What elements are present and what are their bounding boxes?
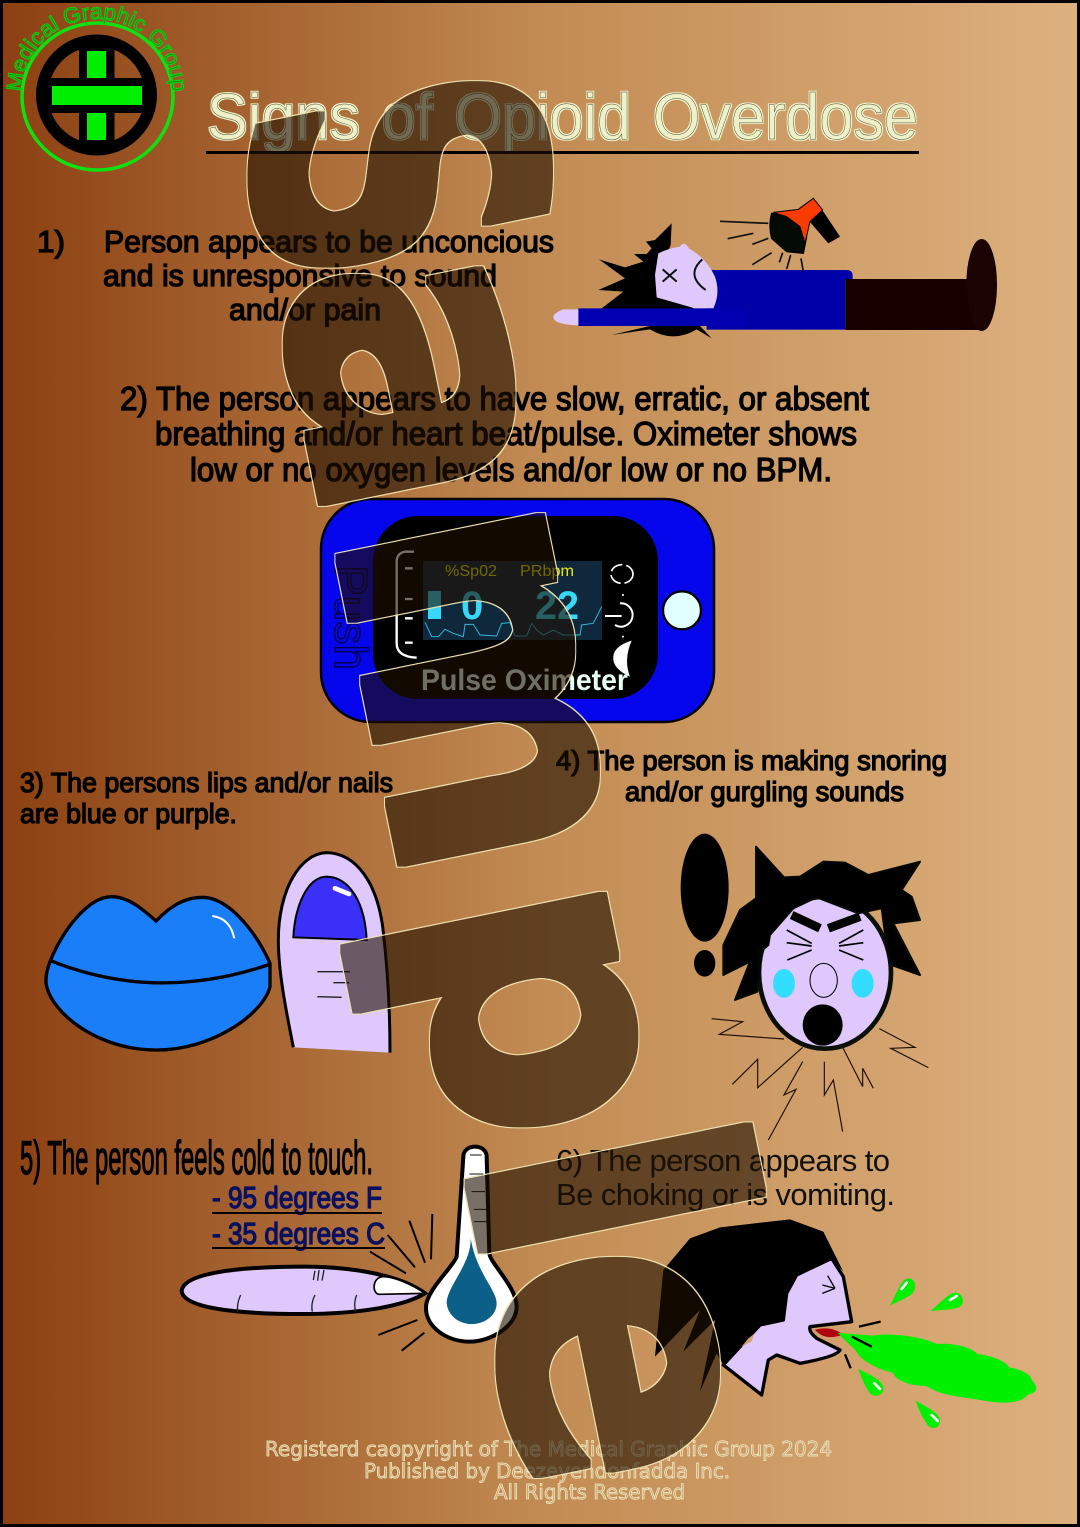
pulse oximeter device: 22 — [535, 584, 579, 628]
logo: Medical Graphic Group — [6, 6, 184, 172]
pulse oximeter device: 0 — [461, 584, 483, 628]
step 1 text: and/or pain — [229, 292, 381, 327]
step 6 text: 6) The person appears to — [556, 1143, 890, 1178]
step 6 text: Be choking or is vomiting. — [556, 1177, 895, 1212]
step 3 text: are blue or purple. — [20, 798, 237, 829]
step 6 text — [556, 1143, 895, 1212]
pulse oximeter device — [321, 499, 714, 722]
footer copyright: Published by Deezeyendonfadda Inc. — [364, 1459, 730, 1483]
pulse oximeter device: PRbpm — [520, 563, 574, 580]
icon: vomiting head — [655, 1219, 1035, 1428]
icon: cold finger and thermometer — [182, 1147, 517, 1351]
icon: unconscious person with air horn — [553, 198, 997, 338]
step 1 text: and is unresponsive to sound — [103, 258, 497, 293]
icon: blue lips — [46, 897, 271, 1050]
step 4 text: and/or gurgling sounds — [625, 776, 904, 807]
step 5 text — [20, 1131, 385, 1251]
footer copyright: All Rights Reserved — [494, 1480, 685, 1504]
logo: Medical Graphic Group: Medical Graphic Group — [6, 6, 184, 92]
step 5 text: - 35 degrees C — [212, 1216, 385, 1251]
step 5 text: 5) The person feels cold to touch. — [20, 1131, 373, 1184]
step 1 text: 1) — [37, 224, 65, 259]
step 2 text: 2) The person appears to have slow, erratic, or absent — [120, 380, 869, 417]
icon: fingernail — [278, 853, 390, 1053]
step 4 text — [556, 745, 947, 807]
watermark: Sample: S — [149, 38, 636, 315]
footer copyright — [265, 1437, 832, 1504]
step 1 text: Person appears to be unconcious — [104, 224, 554, 259]
step 2 text — [120, 380, 869, 488]
title: Signs of Opioid Overdose — [207, 80, 918, 153]
pulse oximeter device: Pulse Oximeter — [421, 664, 628, 697]
watermark: Sample — [149, 38, 872, 1520]
watermark: Sample: l — [374, 1082, 829, 1299]
step 3 text: 3) The persons lips and/or nails — [20, 767, 393, 798]
watermark: Sample: e — [396, 1200, 872, 1520]
step 3 text — [20, 767, 393, 829]
step 2 text: low or no oxygen levels and/or low or no BPM. — [190, 451, 832, 488]
step 1 text — [37, 224, 554, 327]
pulse oximeter device: %Sp02 — [445, 563, 497, 580]
step 5 text: - 95 degrees F — [212, 1180, 382, 1215]
watermark: Sample: p — [328, 840, 777, 1172]
watermark: Sample: a — [188, 206, 669, 550]
watermark: Sample: m — [246, 460, 748, 908]
step 2 text: breathing and/or heart beat/pulse. Oximeter shows — [155, 415, 857, 452]
footer copyright: Registerd caopyright of The Medical Graphic Group 2024 — [265, 1437, 832, 1461]
step 4 text: 4) The person is making snoring — [556, 745, 947, 776]
icon: snoring face — [681, 834, 928, 1140]
pulse oximeter device: Push — [325, 565, 377, 670]
